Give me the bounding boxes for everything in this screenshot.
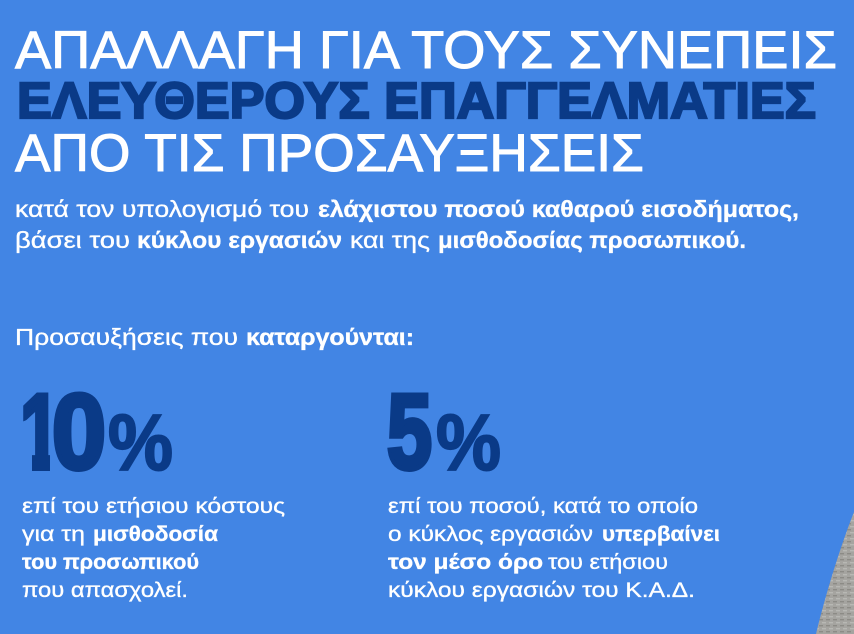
text block: 5 percent description: του ετήσιου xyxy=(548,550,668,574)
subtitle: κατά τον υπολογισμό του xyxy=(15,196,309,222)
subtitle: και της xyxy=(350,227,430,253)
subtitle: μισθοδοσίας προσωπικού. xyxy=(438,227,746,253)
stat: 5 percent: % xyxy=(436,398,501,487)
text block: 10 percent description: μισθοδοσία xyxy=(93,522,218,546)
title: ΑΠΟ ΤΙΣ ΠΡΟΣΑΥΞΗΣΕΙΣ xyxy=(15,124,644,183)
text block: 10 percent description xyxy=(22,494,285,602)
title: ΕΛΕΥΘΕΡΟΥΣ ΕΠΑΓΓΕΛΜΑΤΙΕΣ xyxy=(17,72,816,129)
text block: 10 percent description: για τη xyxy=(22,522,85,546)
stat: 10 percent: 1 xyxy=(20,372,60,492)
photo fragment: grey garment at corner xyxy=(816,512,854,634)
text block: 10 percent description: του προσωπικού xyxy=(22,550,199,574)
stat: 10 percent xyxy=(23,392,172,472)
text block: 5 percent description: υπερβαίνει xyxy=(602,522,720,546)
text block: 10 percent description: επί του ετήσιου κόστους xyxy=(22,494,285,518)
title: ΑΠΑΛΛΑΓΗ ΓΙΑ ΤΟΥΣ ΣΥΝΕΠΕΙΣ xyxy=(15,21,837,80)
section heading: καταργούνται: xyxy=(246,324,414,350)
stat: 5 percent: 5 xyxy=(387,372,432,492)
text block: 5 percent description: κύκλου εργασιών του Κ.Α.Δ. xyxy=(388,578,695,602)
text block: 5 percent description: ο κύκλος εργασιών xyxy=(388,522,593,546)
text block: 10 percent description: που απασχολεί. xyxy=(22,578,188,602)
stat: 10 percent: % xyxy=(108,398,173,487)
stat: 10 percent: 0 xyxy=(52,372,106,492)
section heading: Προσαυξήσεις που xyxy=(15,324,238,350)
text block: 5 percent description: επί του ποσού, κατά το οποίο xyxy=(388,494,698,518)
subtitle: κύκλου εργασιών xyxy=(137,227,342,253)
subtitle xyxy=(15,196,799,253)
stat: 5 percent xyxy=(387,372,501,492)
subtitle: ελάχιστου ποσού καθαρού εισοδήματος, xyxy=(318,196,799,222)
section heading xyxy=(15,324,414,350)
subtitle: βάσει του xyxy=(15,227,130,253)
title xyxy=(15,21,837,183)
text block: 5 percent description xyxy=(388,494,720,602)
text block: 5 percent description: τον μέσο όρο xyxy=(388,550,543,574)
